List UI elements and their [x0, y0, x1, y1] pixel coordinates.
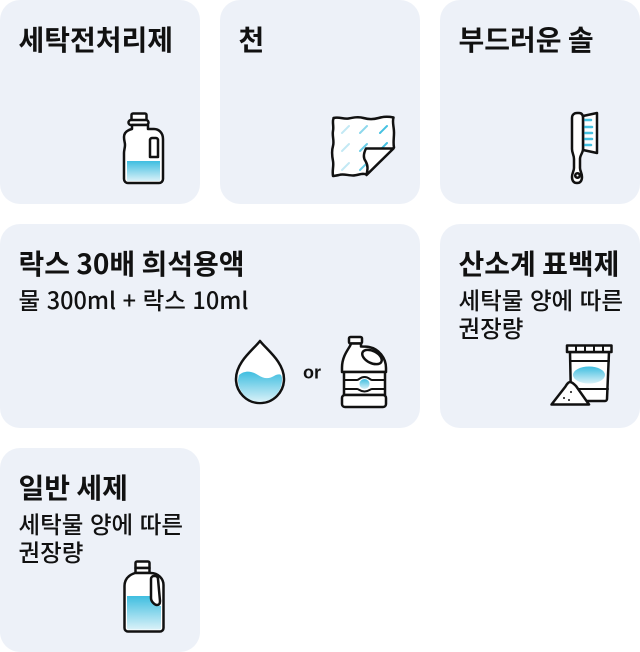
heading: general detergent: 일반 세제 — [18, 467, 128, 507]
panel: cloth — [220, 0, 420, 204]
icon: bleach jug — [342, 337, 386, 407]
text: dilution ratio: 물 300ml + 락스 10ml — [18, 282, 248, 316]
panel: soft brush — [440, 0, 640, 204]
heading: soft brush: 부드러운 솔 — [458, 19, 594, 59]
heading: pretreatment: 세탁전처리제 — [18, 19, 173, 59]
text: bleach amount: 세탁물 양에 따른 — [458, 282, 623, 316]
text: detergent amount: 권장량 — [18, 534, 83, 568]
icon: detergent bottle — [124, 562, 164, 632]
panel: general detergent — [0, 448, 200, 652]
panel: oxygen bleach — [440, 224, 640, 428]
icon: cloth — [332, 117, 394, 176]
icon: bleach tub and powder — [552, 346, 612, 404]
text: bleach amount: 권장량 — [458, 310, 523, 344]
panel: diluted bleach — [0, 224, 420, 428]
heading: cloth: 천 — [238, 19, 264, 59]
icon: water drop — [236, 341, 284, 403]
label: or: or — [303, 362, 321, 382]
icon: pretreatment bottle — [124, 114, 163, 183]
text: bleach amount — [458, 282, 623, 344]
text: detergent amount: 세탁물 양에 따른 — [18, 506, 183, 540]
heading: oxygen bleach: 산소계 표백제 — [458, 243, 619, 283]
heading: diluted bleach: 락스 30배 희석용액 — [18, 243, 245, 283]
icon: brush — [572, 113, 597, 183]
panel: laundry pretreatment — [0, 0, 200, 204]
text: detergent amount — [18, 506, 183, 568]
